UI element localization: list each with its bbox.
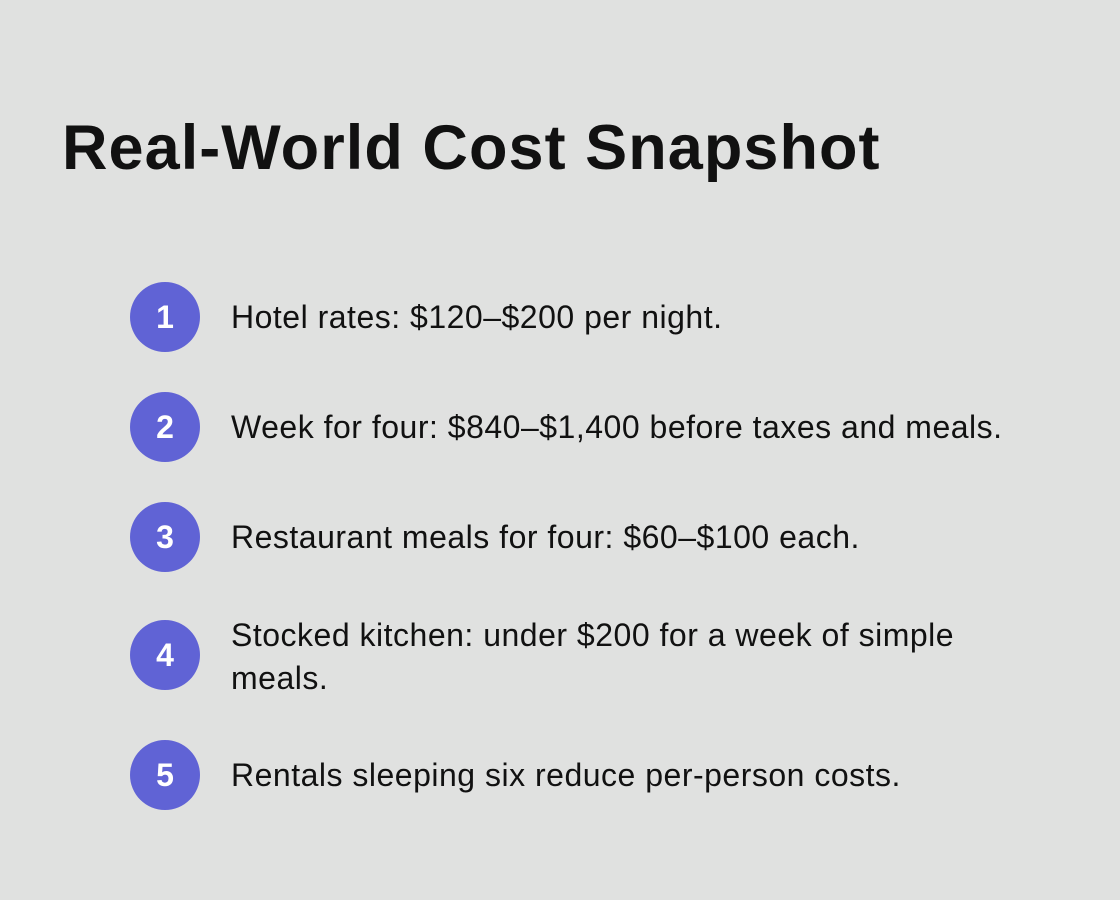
title: Real-World Cost Snapshot (62, 113, 881, 183)
text 4 (231, 617, 954, 696)
number badge 4 (130, 620, 200, 690)
number badge 2 (130, 392, 200, 462)
text 4: meals. (231, 660, 328, 696)
number badge 5 (130, 740, 200, 810)
number badge 1: 1 (156, 299, 174, 335)
number badge 4: 4 (156, 637, 174, 673)
number badge 3 (130, 502, 200, 572)
text 3: Restaurant meals for four: $60–$100 each. (231, 519, 860, 555)
item 1 (130, 282, 722, 352)
text 4: Stocked kitchen: under $200 for a week of simple (231, 617, 954, 653)
item 5 (130, 740, 901, 810)
number badge 2: 2 (156, 409, 174, 445)
text 1: Hotel rates: $120–$200 per night. (231, 299, 722, 335)
number badge 3: 3 (156, 519, 174, 555)
number badge 5: 5 (156, 757, 174, 793)
item 4 (130, 617, 954, 696)
item 3 (130, 502, 860, 572)
item 2 (130, 392, 1003, 462)
text 2: Week for four: $840–$1,400 before taxes and meals. (231, 409, 1003, 445)
number badge 1 (130, 282, 200, 352)
text 5: Rentals sleeping six reduce per-person costs. (231, 757, 901, 793)
